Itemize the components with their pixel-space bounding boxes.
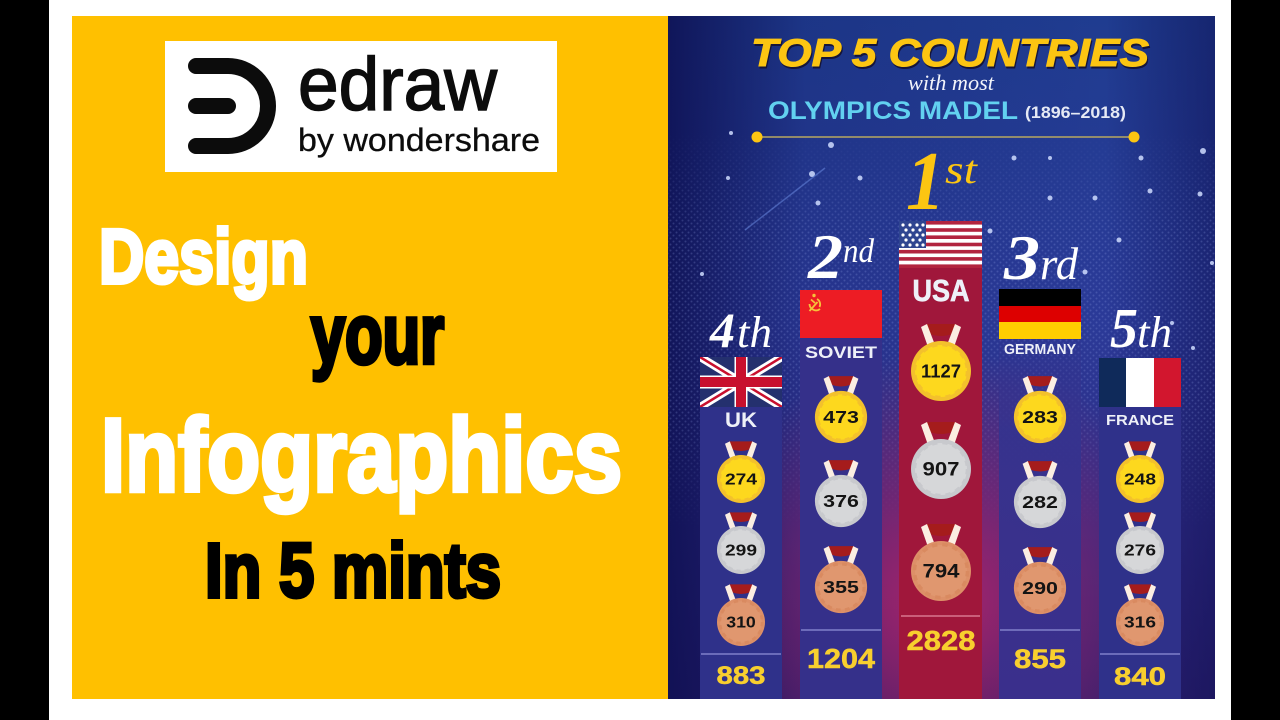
column: France <box>1099 298 1181 699</box>
medal: USA bronze <box>911 524 971 601</box>
headline: Design: Design <box>99 214 308 300</box>
medal: France gold <box>1116 441 1164 503</box>
medal: France bronze: 316 <box>1124 615 1156 632</box>
logo wordmark: edraw <box>298 42 498 126</box>
medal: Germany bronze <box>1014 547 1066 614</box>
medal: Soviet gold <box>815 376 867 443</box>
total: Germany: 855 <box>1014 644 1066 674</box>
total: USA: 2828 <box>906 625 976 656</box>
panel: olympic medal infographic <box>668 16 1215 699</box>
total: UK: 883 <box>716 662 766 690</box>
rank: 2nd <box>807 221 875 292</box>
rank: 4th: 4 <box>709 302 735 358</box>
medal: Germany silver <box>1014 461 1066 528</box>
medal: USA gold <box>911 324 971 401</box>
rank: 3rd: rd <box>1040 238 1079 289</box>
medal: France silver: 276 <box>1124 543 1156 560</box>
medal: Soviet bronze <box>815 546 867 613</box>
rank: 4th: th <box>737 308 772 357</box>
country name: USA: USA <box>912 273 970 308</box>
country name: UK: UK <box>725 409 757 432</box>
logo byline: by wondershare <box>298 122 540 158</box>
total: France: 840 <box>1114 663 1166 691</box>
rank: 4th <box>709 302 772 358</box>
logo: edraw by wondershare <box>165 41 557 172</box>
headline: In 5 mints: In 5 mints <box>205 528 501 614</box>
rank: 2nd: nd <box>843 233 875 270</box>
rank: 5th <box>1110 298 1172 360</box>
headline: Infographics: Infographics <box>101 398 622 514</box>
subtitle: date range: (1896–2018) <box>1025 103 1126 122</box>
icon: hammer and sickle <box>810 295 820 311</box>
medal: France gold: 248 <box>1124 472 1156 489</box>
subtitle: Olympics Madel: OLYMPICS MADEL <box>768 97 1018 125</box>
medal: UK gold <box>717 441 765 503</box>
medal: Germany silver: 282 <box>1022 492 1058 512</box>
medal: USA silver: 907 <box>922 460 960 480</box>
flag: Germany <box>999 289 1081 339</box>
column: Soviet <box>800 221 882 699</box>
divider with gold dots <box>752 132 1140 142</box>
panel: yellow promo <box>72 16 668 699</box>
rank: 3rd: 3 <box>1003 222 1040 293</box>
column: Germany <box>999 222 1081 699</box>
flag: USA <box>899 221 982 268</box>
country name: Soviet: SOVIET <box>805 343 878 362</box>
flag: UK <box>700 357 782 407</box>
rank: 1st <box>906 135 978 228</box>
column: USA <box>899 135 982 699</box>
medal: UK bronze <box>717 584 765 646</box>
column: UK <box>700 302 782 699</box>
subtitle: with most: with most <box>908 70 995 95</box>
medal: Germany gold: 283 <box>1022 407 1058 427</box>
rank: 5th: 5 <box>1110 298 1138 360</box>
rank: 1st: st <box>945 147 978 192</box>
medal: France bronze <box>1116 584 1164 646</box>
medal: France silver <box>1116 512 1164 574</box>
flag: Soviet <box>800 290 882 338</box>
medal: Germany gold <box>1014 376 1066 443</box>
title: Top 5 Countries: TOP 5 COUNTRIES <box>751 32 1149 75</box>
rank: 5th: th <box>1137 308 1172 357</box>
rank: 1st: 1 <box>906 135 945 228</box>
medal: Soviet silver: 376 <box>823 491 859 511</box>
medal: Soviet gold: 473 <box>823 407 859 427</box>
rank: 3rd <box>1003 222 1079 293</box>
medal: UK silver: 299 <box>725 543 757 560</box>
medal: UK gold: 274 <box>725 472 757 489</box>
title: Top 5 Countries: TOP 5 COUNTRIES <box>752 34 1150 77</box>
country name: France: FRANCE <box>1106 412 1174 429</box>
icon: edraw mark <box>196 66 268 146</box>
flag: France <box>1099 358 1181 407</box>
headline: your: your <box>311 287 444 381</box>
medal: USA silver <box>911 422 971 499</box>
medal: Soviet bronze: 355 <box>823 577 859 597</box>
medal: USA gold: 1127 <box>921 362 961 382</box>
total: Soviet: 1204 <box>807 643 875 674</box>
country name: Germany: GERMANY <box>1004 342 1076 358</box>
medal: USA bronze: 794 <box>922 562 960 582</box>
medal: Germany bronze: 290 <box>1022 578 1058 598</box>
medal: Soviet silver <box>815 460 867 527</box>
medal: UK silver <box>717 512 765 574</box>
medal: UK bronze: 310 <box>726 615 756 632</box>
rank: 2nd: 2 <box>807 221 843 292</box>
